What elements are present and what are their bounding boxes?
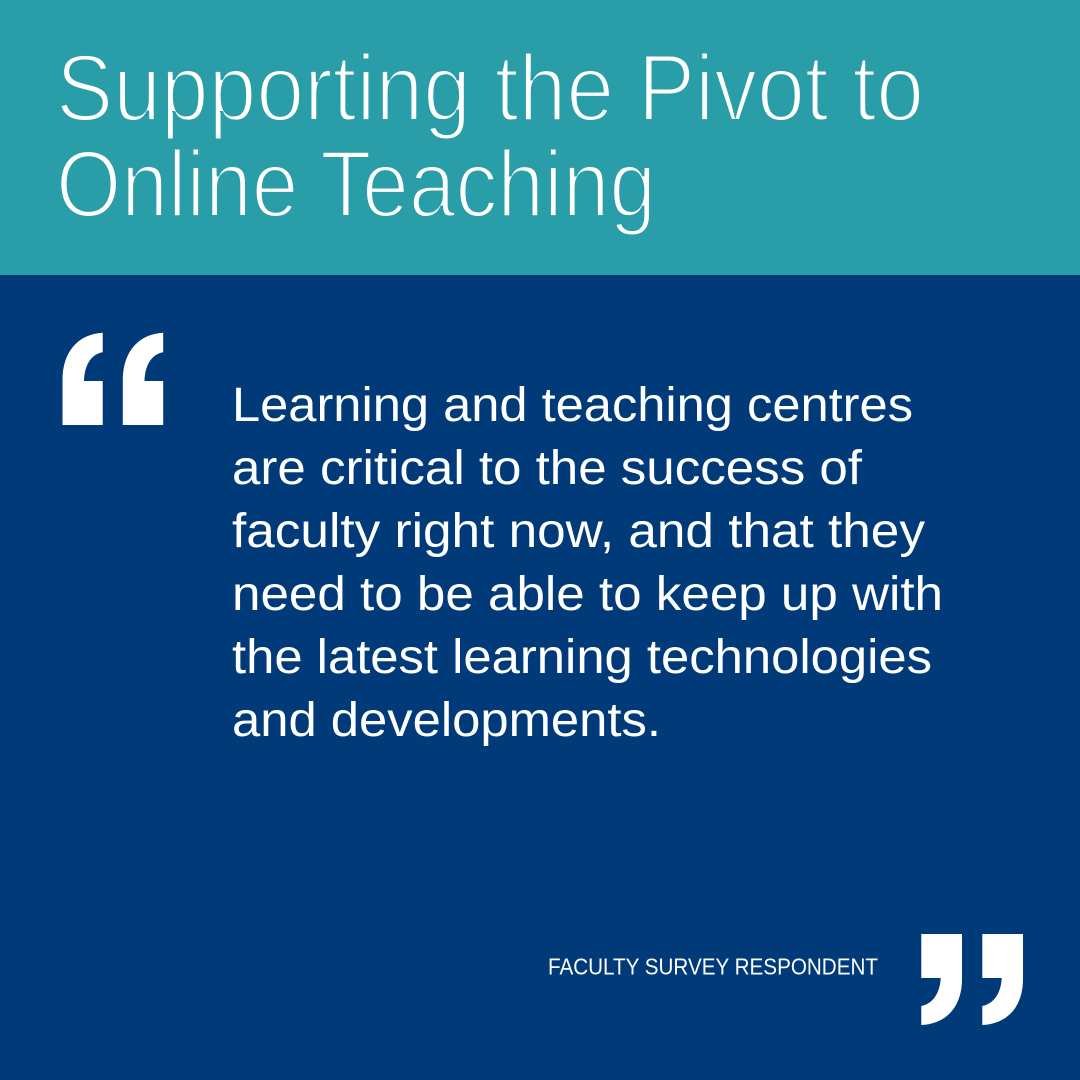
title: Supporting the Pivot to [56, 36, 924, 142]
header band: teal [0, 0, 1080, 275]
attribution: FACULTY SURVEY RESPONDENT [548, 954, 878, 980]
quote text: Learning and teaching centres [232, 379, 913, 432]
title: Online Teaching [56, 132, 656, 238]
quote text: and developments. [232, 694, 661, 747]
icon: opening quotation mark [62, 333, 163, 425]
quote text [232, 379, 943, 747]
title [56, 36, 924, 238]
quote text: are critical to the success of [232, 442, 863, 495]
quote text: need to be able to keep up with [232, 568, 943, 621]
quote text: faculty right now, and that they [232, 505, 925, 558]
icon: closing quotation mark [921, 934, 1023, 1025]
quote text: the latest learning technologies [232, 631, 932, 684]
